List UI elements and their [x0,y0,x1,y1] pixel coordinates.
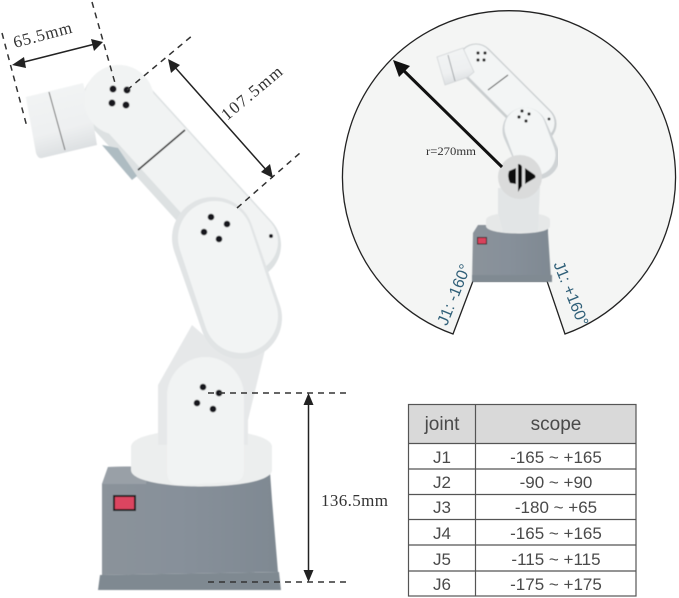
end cylinder [26,83,97,158]
dimension: 136.5mm [208,393,388,582]
joint range table [408,404,636,596]
joint range table: scope [531,414,581,435]
dimension: 107.5mm: 107.5mm [217,62,286,124]
dimension: 65.5mm: 65.5mm [11,18,74,52]
joint range table: -165 ~ +165 [510,448,602,467]
forearm link [213,238,241,318]
joint range table: J5 [433,550,451,569]
joint range table: J2 [433,473,451,492]
upper link [102,100,248,245]
dimension: 107.5mm [127,35,300,208]
dimension: 136.5mm: 136.5mm [321,491,388,510]
radius label: r=270mm [426,144,477,158]
joint range table: J6 [433,575,451,594]
dimension: 65.5mm [2,2,115,127]
J1 positive limit label: J1: +160° [550,259,591,329]
joint range table: J3 [433,498,451,517]
J1 negative limit label: J1: -160° [435,262,475,328]
shoulder ring [131,430,272,486]
joint range table: -180 ~ +65 [515,498,597,517]
panel: workspace circle with J1 range [343,11,676,334]
re-drawn head over cylinder [84,65,154,135]
main robot arm [26,65,281,590]
robot base [98,466,281,590]
joint range table: J4 [433,524,451,543]
joint range table: -90 ~ +90 [520,473,592,492]
neck [158,325,265,445]
joint range table: -165 ~ +165 [510,524,602,543]
joint range table: -175 ~ +175 [510,575,602,594]
joint range table: J1 [433,448,451,467]
mounting holes [108,86,273,412]
shoulder panel [167,357,244,485]
joint range table: -115 ~ +115 [511,550,601,569]
joint range table: joint [424,414,460,435]
small robot illustration [437,48,552,282]
radius arrow [393,60,502,167]
